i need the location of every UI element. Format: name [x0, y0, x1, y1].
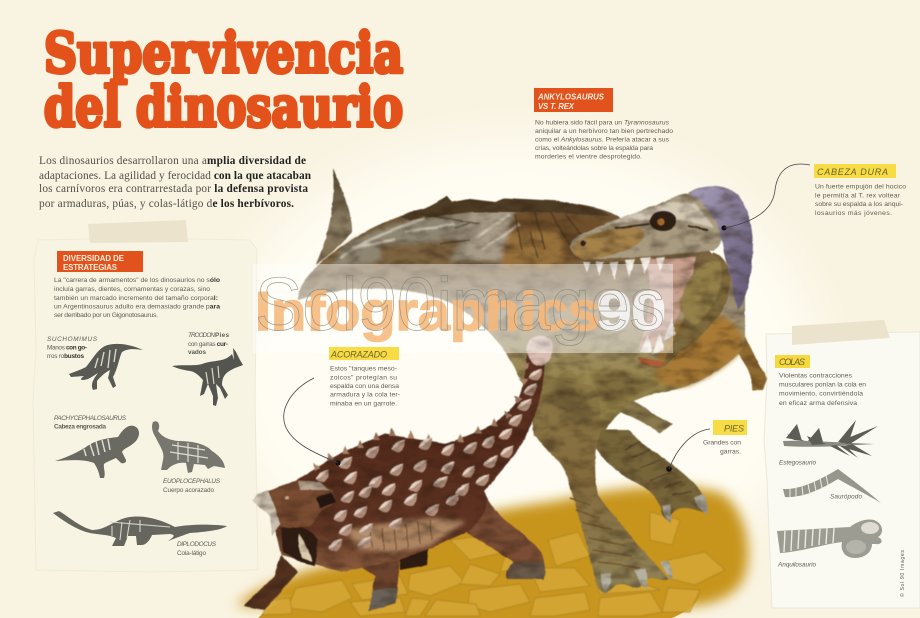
icon: euoplocephalus: EUOPLOCEPHALUS — [163, 478, 221, 485]
heading tag: COLAS — [779, 357, 805, 367]
text block: como el Ankylosaurus. Prefería atacar a sus — [535, 136, 670, 144]
panel text: en eficaz arma defensiva — [779, 400, 857, 407]
panel: diversidad de estrategias — [33, 220, 258, 572]
icon: diplodocus: DIPLODOCUS — [177, 541, 217, 548]
paper sheet — [33, 238, 258, 572]
watermark: 90 — [597, 280, 666, 342]
callout: acorazado — [284, 347, 400, 463]
callout dot: body — [336, 460, 340, 466]
body — [298, 202, 745, 450]
far dark leg — [399, 540, 429, 570]
heading tag: VS T. REX — [538, 102, 575, 111]
panel text — [54, 277, 220, 319]
intro text: adaptaciones. La agilidad y ferocidad con la que atacaban — [39, 170, 312, 182]
icon: anquilosaurio tail — [777, 519, 882, 568]
lower teeth — [640, 318, 676, 354]
credit: © Sol 90 Images — [899, 550, 906, 597]
icon: suchomimus: SUCHOMIMUS — [47, 336, 98, 343]
far leg — [618, 395, 673, 433]
panel text: La "carrera de armamentos" de los dinosaurios no sólo — [54, 277, 220, 284]
text block — [703, 440, 741, 456]
callout: cabeza dura — [724, 164, 906, 228]
armor spikes — [316, 369, 542, 551]
arrow line — [284, 378, 338, 463]
icon: diplodocus — [53, 511, 227, 557]
ground base — [258, 578, 700, 618]
intro text — [39, 155, 312, 210]
callout dot: foot — [666, 466, 672, 472]
panel text: ser derribado por un Gigonotosaurus. — [54, 312, 158, 319]
chin strip — [298, 534, 312, 562]
tail club — [526, 336, 553, 366]
back colour patches — [330, 208, 610, 268]
text block — [815, 184, 906, 217]
claws near foot — [601, 560, 673, 592]
streaks — [340, 215, 520, 258]
icon: pachycephalosaurus — [54, 415, 139, 478]
head — [570, 194, 723, 259]
panel text: incluía garras, dientes, cornamentas y corazas, sino — [54, 286, 210, 293]
icon: troodon: TROODON — [188, 332, 215, 339]
panel text: musculares ponían la cola en — [779, 382, 866, 388]
snout — [572, 226, 644, 260]
heading tag — [814, 164, 896, 178]
callout dot: head — [722, 226, 726, 230]
text block: espalda con una densa — [330, 383, 399, 390]
icon: estegosaurio tail: Estegosaurio — [779, 460, 816, 466]
text block: losaurios más jóvenes. — [815, 210, 892, 217]
text block: No hubiera sido fácil para un Tyrannosaurus — [535, 120, 670, 126]
eye — [650, 211, 676, 231]
chest — [655, 314, 745, 387]
leg stripes — [570, 498, 640, 568]
panel text: Violentas contracciones — [779, 372, 853, 380]
text block: Un fuerte empujón del hocico — [815, 184, 906, 190]
text block: le permitía al T. rex voltear — [815, 192, 901, 200]
watermark: Infographics — [255, 280, 600, 342]
heading tag: ACORAZADO — [330, 350, 387, 360]
icon: troodon — [172, 332, 243, 406]
heading tag: CABEZA DURA — [817, 167, 888, 177]
icon: sauropodo tail — [783, 469, 881, 503]
back spines — [400, 196, 610, 220]
intro text: Los dinosaurios desarrollaron una amplia diversidad de — [39, 155, 306, 167]
icon: estegosaurio tail — [779, 420, 878, 466]
heading tag — [775, 355, 810, 368]
mouth interior — [638, 256, 696, 350]
heading tag — [534, 88, 613, 112]
text block: zoicos" protegían su — [330, 374, 397, 382]
icon: pachycephalosaurus: Cabeza engrosada — [54, 424, 106, 430]
lower jaw — [637, 252, 730, 368]
belly shading — [552, 375, 592, 428]
callout: pies — [669, 420, 747, 469]
ankylosaurus vs t. rex — [534, 88, 673, 160]
title — [44, 20, 403, 139]
near front leg — [244, 555, 298, 610]
icon: suchomimus — [47, 336, 143, 390]
body — [267, 424, 529, 572]
panel text — [779, 372, 866, 407]
arrow line — [724, 164, 810, 228]
text block: crías, volteándolas sobre la espalda para — [535, 145, 653, 152]
back leg — [455, 491, 545, 579]
tyrannosaurus — [298, 168, 767, 593]
crown — [688, 186, 753, 310]
icon: euoplocephalus: Cuerpo acorazado — [163, 487, 214, 494]
head — [252, 480, 335, 528]
upper teeth — [583, 257, 665, 280]
intro text: por armaduras, púas, y colas-látigo de los herbívoros. — [39, 198, 294, 210]
icon: suchomimus: Manos con go- — [47, 344, 87, 352]
heading tag: PIES — [724, 424, 744, 434]
tail — [440, 336, 553, 491]
intro text: los carnívoros era contrarrestada por la defensa provista — [39, 183, 308, 195]
ground — [236, 486, 748, 618]
belly band — [345, 518, 465, 553]
icon: pachycephalosaurus: PACHYCEPHALOSAURUS — [54, 415, 127, 422]
title: del dinosaurio — [44, 74, 403, 139]
second leg — [596, 430, 707, 520]
text block: aniquilar a un herbívoro tan bien pertrechado — [535, 128, 673, 135]
heading tag: ANKYLOSAURUS — [537, 92, 605, 102]
panel text: movimiento, convirtiéndola — [779, 390, 863, 398]
cracked tiles — [262, 512, 725, 616]
text block: morderles el vientre desprotegido. — [535, 154, 642, 160]
icon: troodon: vados — [188, 349, 206, 356]
tail fin — [315, 168, 352, 266]
ankylosaurus — [244, 336, 553, 611]
text block: garras. — [720, 448, 741, 456]
panel text: un Argentinosaurus adulto era demasiado grande para — [54, 304, 220, 310]
text block: Grandes con — [703, 440, 741, 446]
tape — [792, 320, 890, 345]
panel: colas — [764, 320, 920, 608]
near leg — [520, 370, 669, 593]
paper sheet — [764, 332, 920, 608]
icon: troodon: con garras cur- — [188, 341, 228, 348]
tape — [88, 220, 188, 243]
heading tag: ESTRATEGIAS — [63, 263, 117, 272]
icon: anquilosaurio tail: Anquilosaurio — [777, 562, 816, 568]
heading tag: DIVERSIDAD DE — [63, 254, 124, 263]
text block: minaba en un garrote. — [330, 400, 397, 408]
heading tag — [57, 251, 143, 272]
text block: armadura y la cola ter- — [330, 392, 400, 398]
edge spikes — [311, 360, 529, 471]
text block — [535, 120, 673, 160]
panel text: también un marcado incremento del tamaño corporal: — [54, 295, 218, 302]
icon: sauropodo tail: Saurópodo — [830, 494, 862, 500]
icon: diplodocus: Cola-látigo — [177, 550, 206, 557]
title: Supervivencia — [44, 20, 403, 85]
icon: euoplocephalus — [152, 421, 225, 494]
text block: sobre su espalda a los anqui- — [815, 201, 903, 208]
icon: suchomimus: rros robustos — [47, 353, 84, 360]
front leg — [340, 530, 400, 611]
text block: Estos "tanques meso- — [330, 366, 397, 372]
text block — [330, 366, 400, 408]
arm — [728, 320, 767, 390]
arrow line — [669, 429, 710, 469]
watermark: Sol90images — [255, 262, 665, 346]
under-head shadow — [281, 526, 318, 566]
icon: troodon: Pies — [215, 332, 229, 339]
